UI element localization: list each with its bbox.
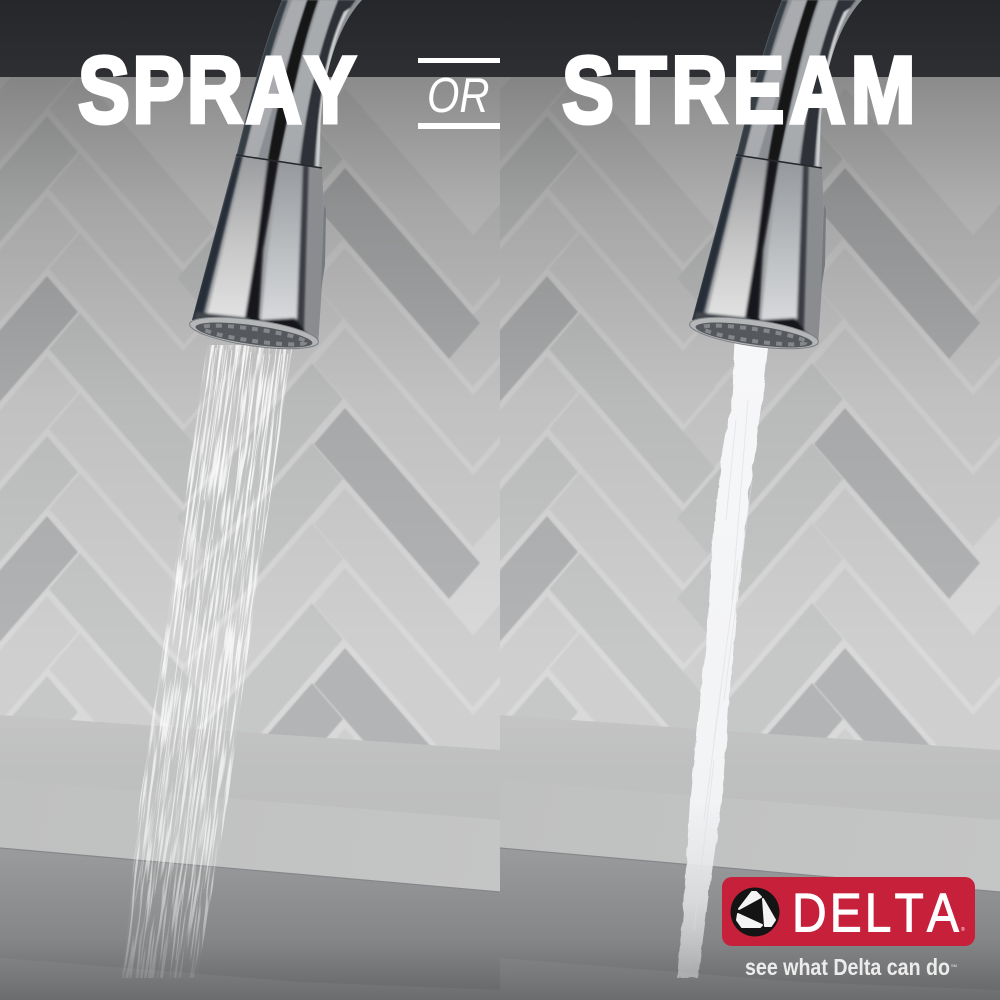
faucet spout [188, 0, 362, 355]
icon: Delta tri-blade mark [730, 888, 780, 936]
Delta logo: ® [961, 926, 965, 933]
heading: STREAM: STREAM [562, 37, 920, 143]
tiled wall and counter background [0, 0, 608, 1000]
panel: stream (right) [500, 0, 1000, 1000]
divider word: OR: OR [427, 68, 489, 123]
panel: spray (left) [0, 0, 500, 1000]
wordmark: DELTA: DELTA [792, 883, 962, 943]
divider word: OR [418, 58, 500, 129]
spray water streams [122, 345, 292, 978]
tiled wall and counter background [284, 0, 1000, 1000]
tagline: see what Delta can do [745, 954, 950, 980]
logo badge [722, 877, 975, 946]
solid water stream [677, 342, 768, 978]
heading: SPRAY: SPRAY [78, 37, 359, 143]
Delta logo: SM [951, 963, 957, 968]
title [78, 37, 920, 143]
Delta logo [722, 877, 975, 980]
faucet spout [688, 0, 862, 355]
